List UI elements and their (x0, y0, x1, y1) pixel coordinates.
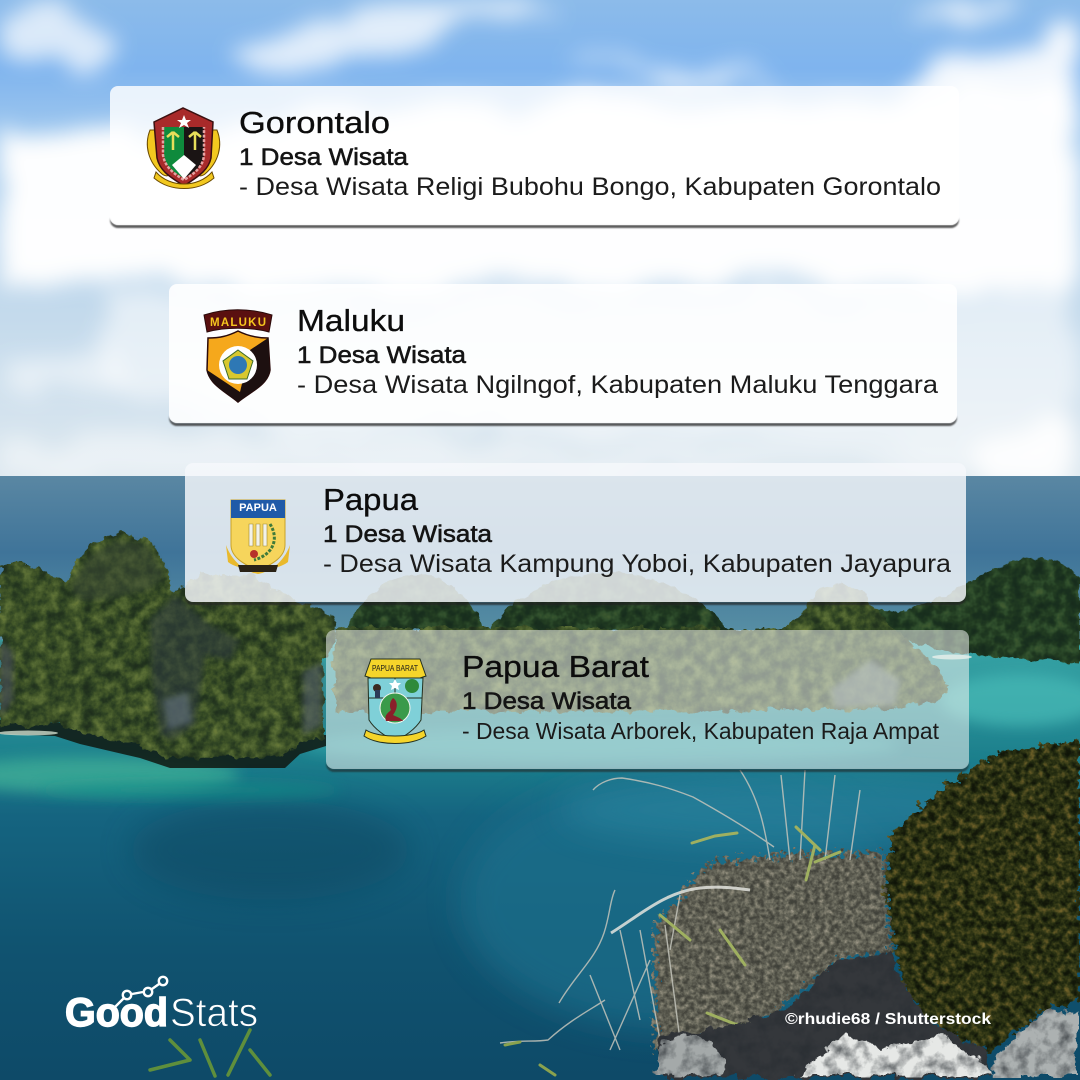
heading: Maluku: Maluku (297, 303, 405, 338)
text: village: - Desa Wisata Kampung Yoboi, Kabupaten Jayapura (323, 550, 951, 578)
text: count: 1 Desa Wisata (297, 342, 467, 369)
text: village: - Desa Wisata Ngilngof, Kabupaten Maluku Tenggara (297, 371, 938, 399)
leaves (150, 827, 840, 1076)
icon: Maluku police crest: MALUKU (210, 317, 266, 329)
panel: Papua (185, 463, 966, 605)
photo credit: ©rhudie68 / Shutterstock (785, 1011, 991, 1028)
icon: Papua Barat crest (364, 659, 426, 744)
panel: Gorontalo (110, 86, 959, 228)
icon: Maluku police crest (204, 310, 272, 402)
icon: trend line (114, 977, 167, 1008)
text: count: 1 Desa Wisata (462, 688, 632, 715)
logo: GoodStats: Stats (170, 991, 258, 1035)
icon: Gorontalo crest (147, 108, 220, 188)
heading: Papua Barat: Papua Barat (462, 649, 649, 684)
text: village: - Desa Wisata Religi Bubohu Bongo, Kabupaten Gorontalo (239, 173, 941, 201)
icon: Papua Barat crest: PAPUA BARAT (372, 663, 418, 673)
island: far right (795, 558, 1080, 664)
text: village: - Desa Wisata Arborek, Kabupaten Raja Ampat (462, 718, 940, 744)
panel: Papua Barat (326, 630, 969, 772)
heading: Papua: Papua (323, 482, 419, 517)
heading: Gorontalo: Gorontalo (239, 105, 390, 140)
vegetation: branches, bush and rocks (150, 740, 1080, 1078)
text: count: 1 Desa Wisata (239, 144, 409, 171)
island: large left (0, 533, 335, 768)
lagoon shallows and depths (0, 674, 1080, 1030)
icon: Papua crest: PAPUA (239, 502, 277, 514)
branches (500, 770, 860, 1050)
clouds (0, 0, 1080, 490)
islands: middle (335, 572, 950, 712)
text: count: 1 Desa Wisata (323, 521, 493, 548)
icon: Papua crest (226, 500, 290, 574)
panel: Maluku (169, 284, 957, 426)
logo: GoodStats (65, 977, 258, 1035)
logo: GoodStats: Good (65, 991, 168, 1035)
